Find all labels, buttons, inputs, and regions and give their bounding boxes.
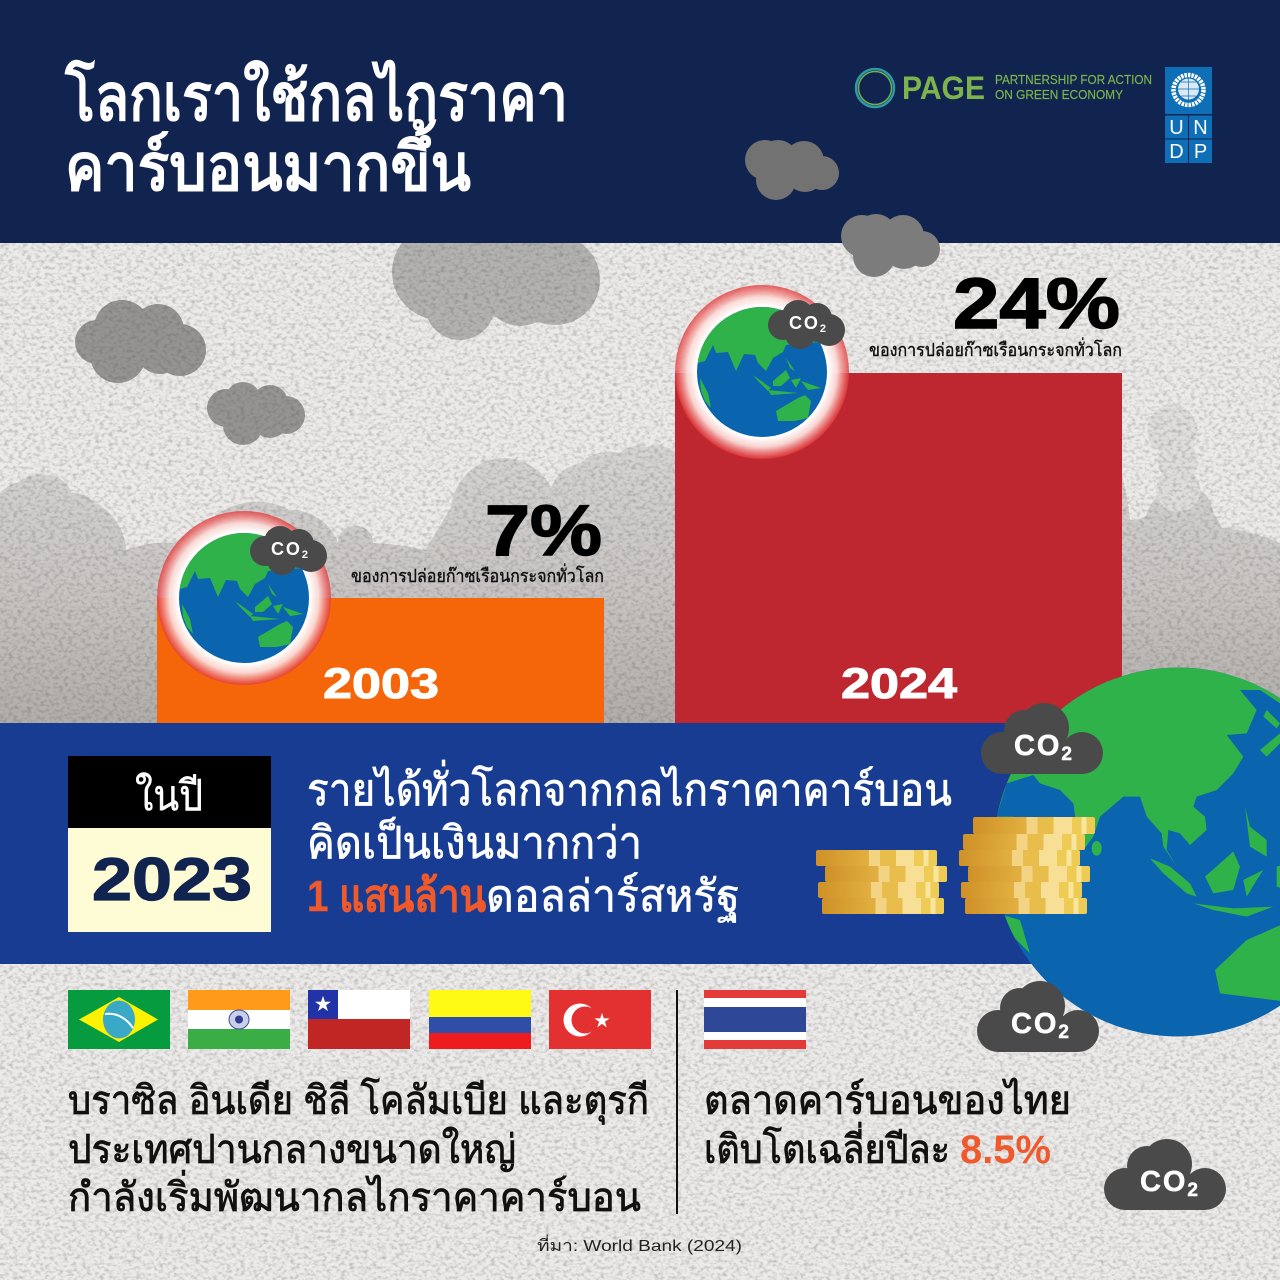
title [64, 58, 568, 204]
flag: Chile [308, 990, 410, 1049]
logo: UNDP [1165, 67, 1212, 163]
revenue text: 1 แสนล้าน [307, 872, 486, 921]
bar: 2003 [157, 598, 604, 723]
globe: 2003: CO [271, 539, 300, 559]
countries text: ประเทศปานกลางขนาดใหญ่ [68, 1126, 516, 1172]
co2 cloud: middle: CO [1011, 1008, 1056, 1040]
co2 cloud: lower: 2 [1187, 1180, 1198, 1201]
logo: UNDP: P [1194, 141, 1207, 163]
globe: 2003: 2 [302, 549, 308, 561]
countries text [68, 1078, 649, 1220]
revenue text: คิดเป็นเงินมากกว่า [307, 817, 642, 868]
value: 24% [869, 265, 1122, 360]
cloud: small background [207, 382, 305, 445]
cloud: left background [75, 300, 206, 383]
revenue text: ดอลล่าร์สหรัฐ [486, 872, 740, 922]
co2 cloud: upper [981, 703, 1103, 774]
cloud: header [745, 140, 839, 200]
faint smoke column [1147, 405, 1200, 512]
coins: tall stack [959, 817, 1095, 914]
globe: 2024: CO [789, 313, 818, 333]
year box [68, 756, 271, 932]
header band [0, 0, 1280, 243]
thailand text: เติบโตเฉลี่ยปีละ [704, 1122, 950, 1172]
year box: ในปี [135, 772, 203, 819]
globe: 2024 [675, 285, 849, 459]
logo: PAGE: ON GREEN ECONOMY [995, 87, 1123, 102]
revenue text [307, 759, 952, 922]
source: ที่มา: World Bank (2024) [537, 1234, 742, 1255]
countries text: บราซิล อินเดีย ชิลี โคลัมเบีย และตุรกี [68, 1078, 649, 1125]
logo: PAGE: PARTNERSHIP FOR ACTION [995, 72, 1152, 87]
value: 24%: 24% [953, 265, 1120, 344]
logo: UNDP: N [1193, 117, 1208, 139]
co2 cloud: middle [977, 981, 1099, 1052]
smoke skyline, right [1100, 440, 1280, 723]
thailand text: ตลาดคาร์บอนของไทย [704, 1078, 1071, 1123]
globe: 2003 [157, 511, 331, 685]
blue band [0, 723, 1280, 964]
smoke skyline, left [0, 445, 680, 723]
title: คาร์บอนมากขึ้น [65, 118, 471, 204]
co2 cloud: lower [1104, 1139, 1226, 1210]
co2 cloud: middle: 2 [1058, 1022, 1069, 1043]
big globe [996, 668, 1280, 1036]
flag: Chile: ★ [314, 995, 332, 1014]
value: 7%: ของการปล่อยก๊าซเรือนกระจกทั่วโลก [351, 563, 604, 586]
divider [676, 990, 678, 1214]
flag: Brazil [68, 990, 170, 1049]
year box: 2023 [92, 846, 252, 913]
flag: Turkey: ★ [594, 1013, 610, 1030]
title: โลกเราใช้กลไกราคา [64, 58, 568, 134]
cloud: header edge [841, 214, 940, 277]
co2 cloud: lower: CO [1140, 1166, 1185, 1198]
bar: 2024: 2024 [841, 660, 957, 708]
thailand text [704, 1078, 1071, 1172]
co2 cloud: upper: 2 [1061, 744, 1072, 765]
value: 7%: 7% [485, 492, 602, 571]
co2 cloud: upper: CO [1014, 730, 1059, 762]
countries text: กำลังเริ่มพัฒนากลไกราคาคาร์บอน [68, 1170, 641, 1220]
value: 7% [351, 492, 604, 586]
logo: UNDP: D [1169, 141, 1184, 163]
bar: 2003: 2003 [323, 660, 439, 708]
logo: PAGE: PAGE [902, 70, 985, 106]
flag: Turkey [549, 990, 651, 1049]
flag: Thailand [704, 990, 806, 1049]
bar: 2024 [675, 373, 1122, 723]
flag: India [188, 990, 290, 1049]
globe: 2024: 2 [820, 323, 826, 335]
coins: small stack [816, 850, 947, 914]
logo: PAGE [856, 69, 1152, 107]
logo: UNDP: U [1169, 117, 1184, 139]
flag: Colombia [429, 990, 531, 1049]
value: 24%: ของการปล่อยก๊าซเรือนกระจกทั่วโลก [869, 337, 1122, 360]
revenue text: รายได้ทั่วโลกจากกลไกราคาคาร์บอน [307, 759, 952, 815]
thailand text: 8.5% [960, 1128, 1051, 1172]
cloud: large top background [392, 207, 600, 340]
